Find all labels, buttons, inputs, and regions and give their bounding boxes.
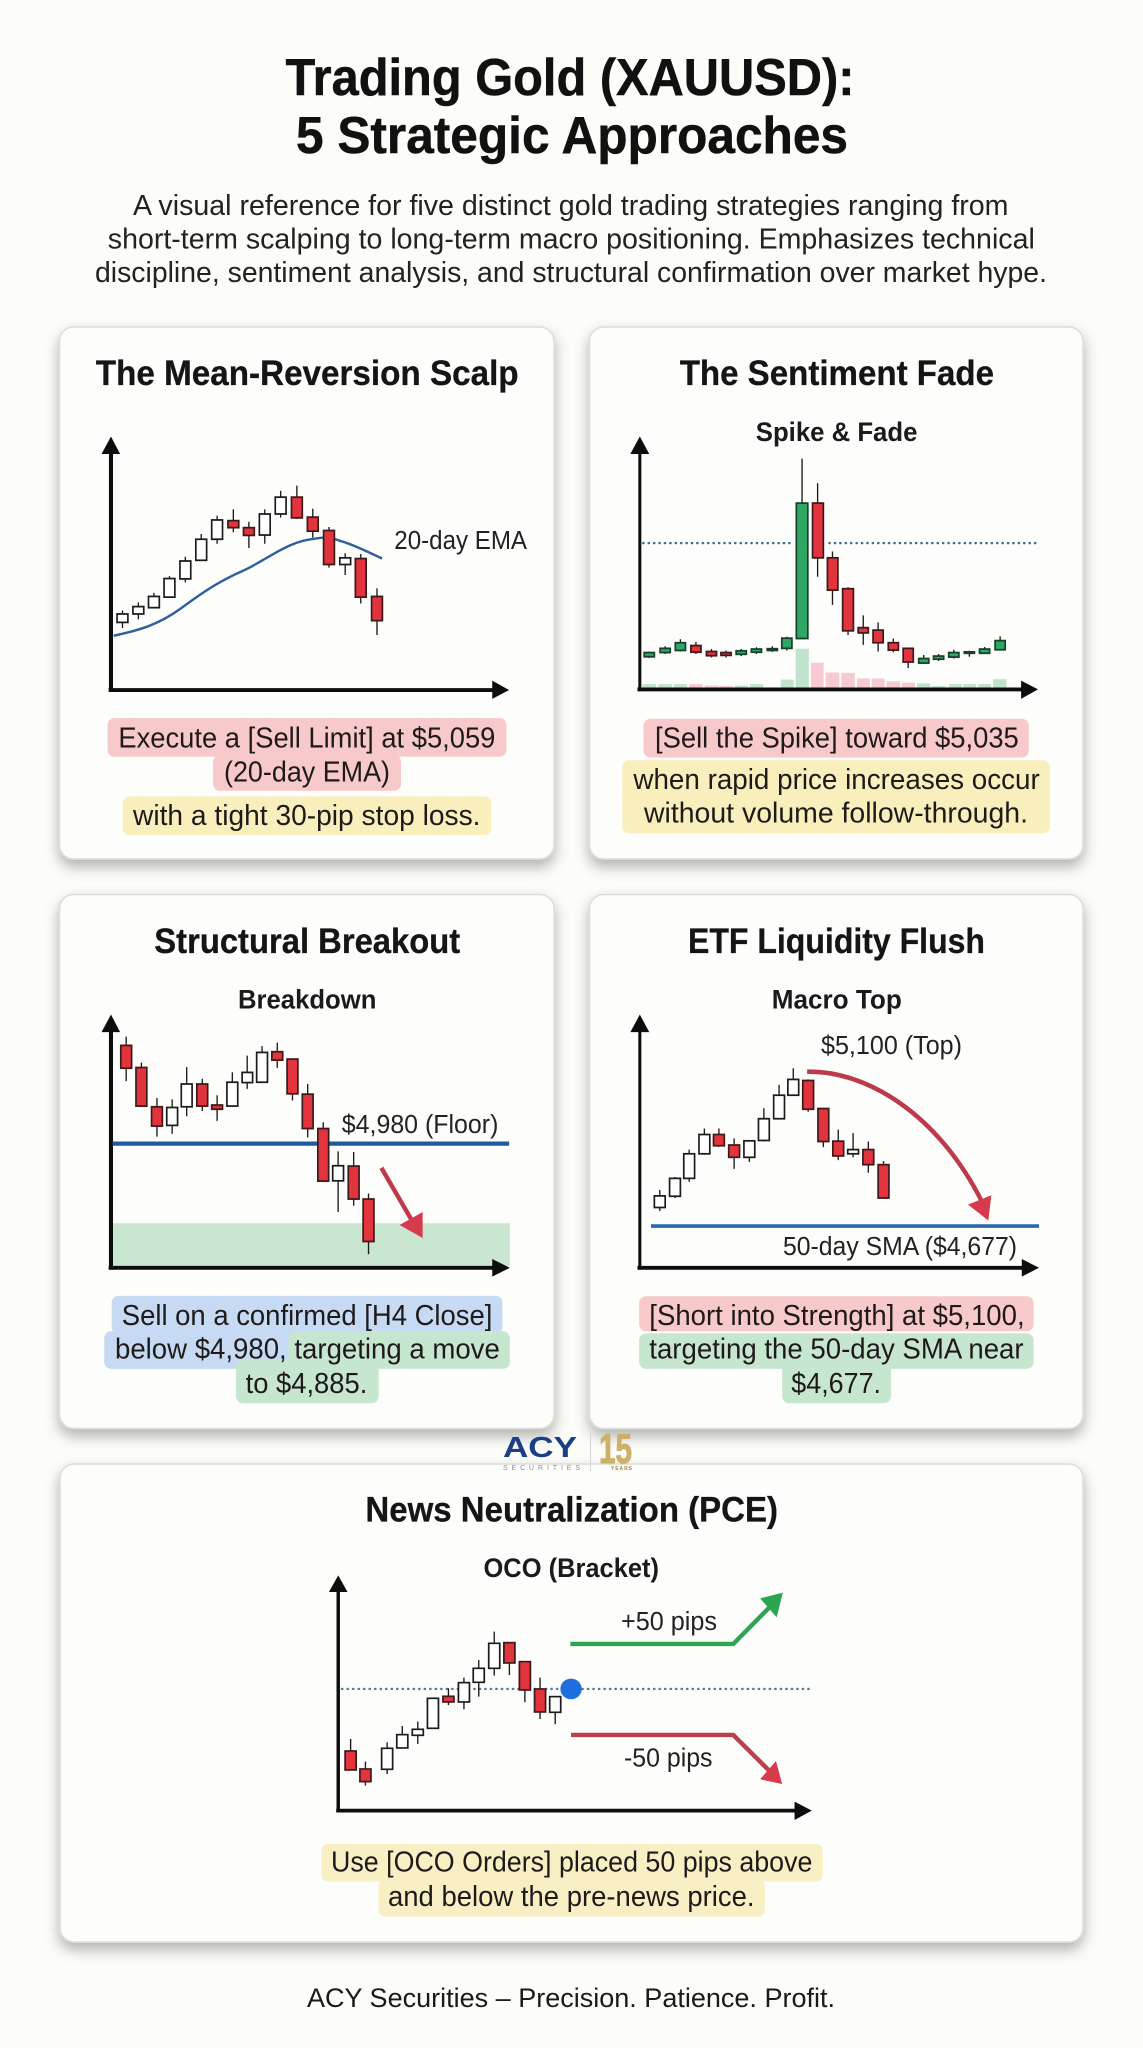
callout text: $4,677. <box>791 1368 881 1400</box>
subtitle <box>95 190 1047 289</box>
label: SMA: 50-day SMA ($4,677) <box>783 1233 1017 1261</box>
callout text: [Sell the Spike] toward $5,035 <box>655 722 1019 754</box>
line: 20-day EMA <box>114 538 382 636</box>
arrow: down -50 pips <box>571 1735 782 1784</box>
card background <box>590 327 1083 859</box>
logo: ACY Securities 15 years: 15 <box>599 1425 632 1472</box>
callout text: targeting the 50-day SMA near <box>649 1333 1024 1365</box>
label: -50 pips: -50 pips <box>624 1745 712 1773</box>
callout text: with a tight 30-pip stop loss. <box>132 800 481 832</box>
callout text: (20-day EMA) <box>224 756 390 788</box>
subheading: Macro Top <box>772 985 902 1015</box>
candlesticks <box>654 1068 889 1211</box>
card background <box>60 327 554 859</box>
title: Trading Gold (XAUUSD): <box>286 49 854 107</box>
chart: spike and fade <box>630 436 1038 699</box>
volume bars <box>643 649 1007 688</box>
subheading: Breakdown <box>238 985 376 1015</box>
panel: Structural Breakout <box>60 894 554 1428</box>
panel: ETF Liquidity Flush <box>590 894 1083 1428</box>
floor line <box>113 1138 509 1150</box>
target zone <box>113 1223 510 1266</box>
callout text <box>622 719 1050 833</box>
callout text: below $4,980, targeting a move <box>115 1333 500 1365</box>
title: 5 Strategic Approaches <box>296 107 848 165</box>
card background <box>60 1464 1083 1942</box>
card background <box>60 894 554 1428</box>
panel: The Mean-Reversion Scalp <box>60 327 554 859</box>
dotted level line <box>643 540 1036 547</box>
pre-news price marker <box>560 1679 582 1699</box>
subtitle: A visual reference for five distinct gold trading strategies ranging from <box>133 190 1008 222</box>
callout text: and below the pre-news price. <box>388 1881 754 1913</box>
SMA line <box>651 1221 1039 1231</box>
axes <box>102 436 509 699</box>
dotted pre-news price line <box>342 1685 810 1692</box>
panel: News Neutralization (PCE) <box>60 1464 1083 1942</box>
arrow: up +50 pips <box>570 1593 783 1644</box>
candlesticks <box>345 1632 561 1786</box>
chart: breakdown <box>102 1015 510 1277</box>
subheading: Spike & Fade <box>756 417 917 447</box>
panel: The Sentiment Fade <box>590 327 1083 859</box>
axes <box>630 1015 1039 1277</box>
heading: Structural Breakout <box>154 922 461 961</box>
callout text: Use [OCO Orders] placed 50 pips above <box>331 1847 812 1879</box>
footer: ACY Securities – Precision. Patience. Profit. <box>307 1983 835 2013</box>
callout text <box>321 1844 823 1917</box>
label: +50 pips: +50 pips <box>621 1608 717 1636</box>
candlesticks <box>117 486 382 635</box>
heading: ETF Liquidity Flush <box>688 922 985 961</box>
candlesticks <box>121 1037 374 1254</box>
candlesticks <box>644 459 1005 668</box>
card background <box>590 894 1083 1428</box>
label: top price: $5,100 (Top) <box>821 1032 962 1060</box>
callout text: when rapid price increases occur <box>632 764 1040 796</box>
callout text <box>108 718 506 835</box>
callout text: to $4,885. <box>246 1368 367 1400</box>
chart: OCO bracket <box>329 1575 812 1820</box>
subheading: OCO (Bracket) <box>484 1553 659 1583</box>
heading: The Sentiment Fade <box>680 354 994 393</box>
heading: The Mean-Reversion Scalp <box>96 354 519 393</box>
axes <box>329 1575 812 1820</box>
logo: ACY Securities 15 years <box>503 1425 633 1472</box>
callout text <box>104 1296 510 1403</box>
logo: ACY Securities 15 years: YEARS <box>611 1466 633 1472</box>
callout text: Sell on a confirmed [H4 Close] <box>122 1300 492 1332</box>
logo: ACY Securities 15 years: SECURITIES <box>503 1465 580 1472</box>
subtitle: discipline, sentiment analysis, and structural confirmation over market hype. <box>95 257 1047 289</box>
axes <box>630 436 1038 699</box>
axes <box>102 1015 510 1277</box>
subtitle: short-term scalping to long-term macro positioning. Emphasizes technical <box>108 224 1035 256</box>
label: 20-day EMA: 20-day EMA <box>394 527 527 555</box>
logo: ACY Securities 15 years: ACY <box>503 1432 577 1464</box>
callout text: without volume follow-through. <box>643 798 1028 830</box>
callout text <box>639 1296 1034 1403</box>
callout text: Execute a [Sell Limit] at $5,059 <box>118 722 495 754</box>
title <box>286 49 854 165</box>
arrow: curved down to SMA <box>807 1072 991 1220</box>
chart: macro top <box>630 1015 1039 1277</box>
callout text: [Short into Strength] at $5,100, <box>649 1300 1025 1332</box>
heading: News Neutralization (PCE) <box>365 1491 778 1530</box>
chart: EMA candlesticks <box>102 436 509 699</box>
arrow: down to target <box>381 1168 423 1238</box>
label: floor: $4,980 (Floor) <box>342 1111 498 1139</box>
